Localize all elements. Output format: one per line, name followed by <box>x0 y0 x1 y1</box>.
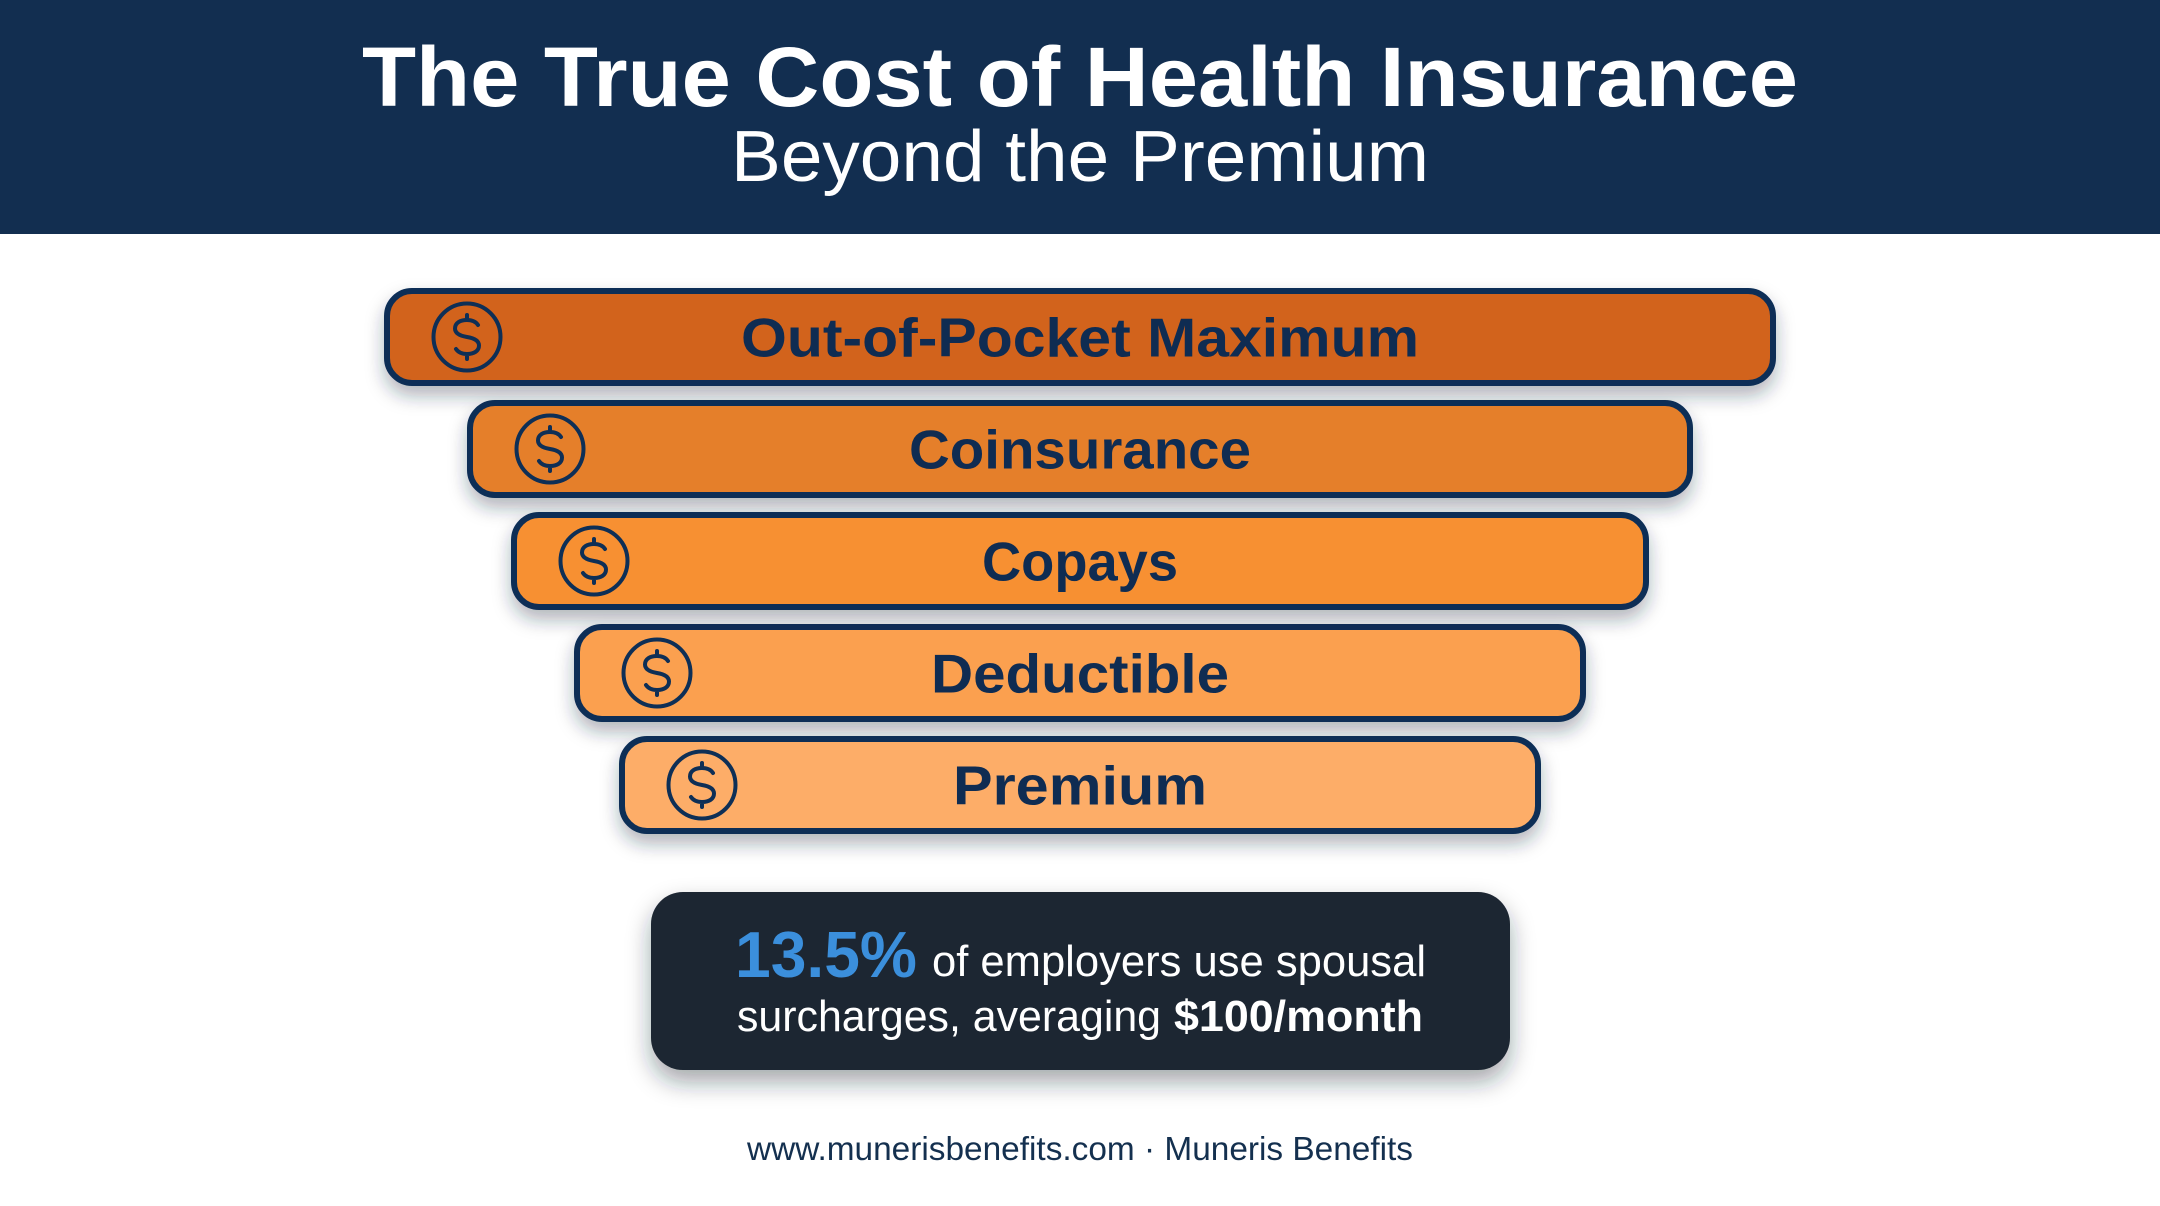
icon: dollar coin <box>516 416 584 482</box>
footer: www.munerisbenefits.com · Muneris Benefits <box>746 1130 1413 1167</box>
funnel bar: Coinsurance <box>470 403 1690 495</box>
label: Coinsurance <box>909 418 1251 480</box>
funnel bar: Premium <box>622 739 1538 831</box>
label: Deductible <box>931 642 1229 704</box>
funnel bar: Deductible <box>577 627 1583 719</box>
icon: dollar coin <box>560 528 628 594</box>
funnel bar: Copays <box>514 515 1646 607</box>
label: Out-of-Pocket Maximum <box>741 306 1419 368</box>
statistic: 13.5%: 13.5% <box>735 918 917 991</box>
callout text line 1: of employers use spousal <box>932 937 1426 986</box>
callout text line 2: surcharges, averaging <box>737 992 1161 1041</box>
subtitle: Beyond the Premium <box>731 117 1429 197</box>
icon: dollar coin <box>434 304 500 370</box>
icon: dollar coin <box>668 752 736 818</box>
callout amount: $100/month <box>1174 992 1423 1041</box>
label: Copays <box>982 530 1178 592</box>
header banner <box>0 0 2160 234</box>
icon: dollar coin <box>624 640 690 706</box>
title: The True Cost of Health Insurance <box>362 30 1798 124</box>
funnel bar: Out-of-Pocket Maximum <box>387 291 1773 383</box>
callout: spousal surcharge statistic <box>651 892 1510 1070</box>
label: Premium <box>953 754 1207 816</box>
